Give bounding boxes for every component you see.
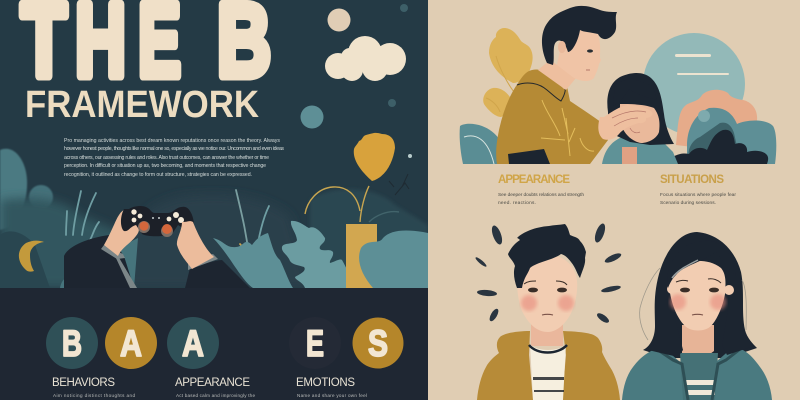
leaf plant right [282, 220, 346, 288]
boy neck [538, 60, 576, 90]
anxious marks around boy [474, 222, 622, 324]
small captions bottom: Name and share your own feel [297, 393, 367, 398]
label: EMOTIONS: EMOTIONS [296, 377, 355, 389]
small captions bottom: Aim noticing distinct thoughts and [53, 393, 135, 398]
appearance caption: need. reactions. [498, 200, 536, 206]
icon: gold pot [346, 224, 377, 288]
heading: SITUATIONS: SITUATIONS [660, 174, 724, 186]
icon: beige moon circle [328, 8, 350, 32]
jacket [622, 348, 772, 400]
letter circle E [289, 317, 341, 369]
letter circle A gold [105, 317, 157, 369]
icon: gold crescent [19, 241, 44, 272]
panel: left dark scene [0, 0, 428, 288]
shirt [530, 344, 566, 400]
hair [508, 224, 586, 288]
leaf plant center [213, 233, 293, 288]
boy ear [558, 41, 566, 53]
appearance caption: See deeper doubts relations and strength [498, 192, 584, 198]
boy hand [598, 108, 624, 140]
small captions bottom [53, 393, 367, 398]
face [517, 255, 577, 332]
letter circle A gold: A [120, 323, 142, 364]
situations caption [660, 192, 736, 206]
hair fringe [667, 241, 736, 288]
situations caption: Focus situations where people fear [660, 192, 736, 198]
hair back [643, 232, 757, 358]
letter circle E: E [306, 323, 324, 364]
left sleeve [64, 235, 134, 288]
label: BEHAVIORS: BEHAVIORS [52, 377, 115, 389]
appearance caption [498, 192, 584, 206]
letter circle S gold [352, 318, 404, 368]
neck [531, 322, 563, 346]
body text block: however honest people, thoughts like normal one so, especially as we notice our. Uncommon and even ideas [64, 146, 284, 152]
letter circle A teal: A [182, 323, 204, 364]
icon: gold stems [305, 186, 399, 222]
body text block [64, 138, 284, 178]
speech sphere background [643, 33, 776, 164]
icon: small teal dot top [400, 4, 408, 12]
stray hair strand [640, 268, 746, 340]
letter circle B: B [62, 323, 82, 364]
panel: right background [428, 0, 800, 400]
icon: small branch [389, 174, 409, 195]
jacket [477, 331, 620, 400]
gold leaves [483, 28, 533, 127]
subtitle: FRAMEWORK: FRAMEWORK [25, 84, 260, 126]
body text block: recognition, it outlined as change to form out structure, strategies can be expressed. [64, 172, 252, 178]
boy face [557, 30, 601, 81]
heading: APPEARANCE: APPEARANCE [498, 174, 570, 186]
neck [682, 325, 714, 363]
body text block: across others, our assessing rules and roles. Also trust outcomes, can answer the whether or time [64, 155, 269, 161]
icon: gold leaf [354, 133, 395, 181]
title: THE B [21, 0, 271, 99]
person: boy with jacket [477, 224, 620, 400]
face [669, 261, 726, 330]
letter circle S gold: S [368, 323, 388, 364]
body text block: perception. In difficult or situation up as, two becoming, and moments that respective change [64, 163, 266, 169]
letter circle A teal [167, 317, 219, 369]
right sleeve [185, 260, 250, 288]
icon: game controller [121, 206, 194, 237]
background foliage [0, 149, 428, 288]
icon: small teal dot middle [388, 99, 396, 107]
teal bush left [460, 124, 498, 164]
boy hair [542, 6, 617, 65]
icon: cloud [325, 36, 406, 81]
girl figure [602, 73, 678, 164]
big teal leaf right [359, 230, 428, 288]
boy figure [496, 6, 653, 164]
icon: teal circle [300, 106, 324, 128]
body text block: Pro managing activities across best dream known reputations once reason the theory. Always [64, 138, 280, 144]
controller hands left [104, 209, 139, 256]
situations caption: Scenario during sessions. [660, 200, 716, 206]
icon: grass blades [65, 189, 270, 246]
illustration: boy comforting girl [460, 6, 776, 164]
person: girl with teal jacket [622, 232, 772, 400]
label: APPEARANCE: APPEARANCE [175, 377, 250, 389]
controller hand right [177, 221, 214, 269]
small captions bottom: Act based calm and improvingly the [176, 393, 255, 398]
panel: bottom letter band [0, 288, 428, 400]
hair front locks [648, 309, 751, 357]
letter circle B [46, 317, 98, 369]
illustration: garden scene with controller [0, 133, 428, 288]
